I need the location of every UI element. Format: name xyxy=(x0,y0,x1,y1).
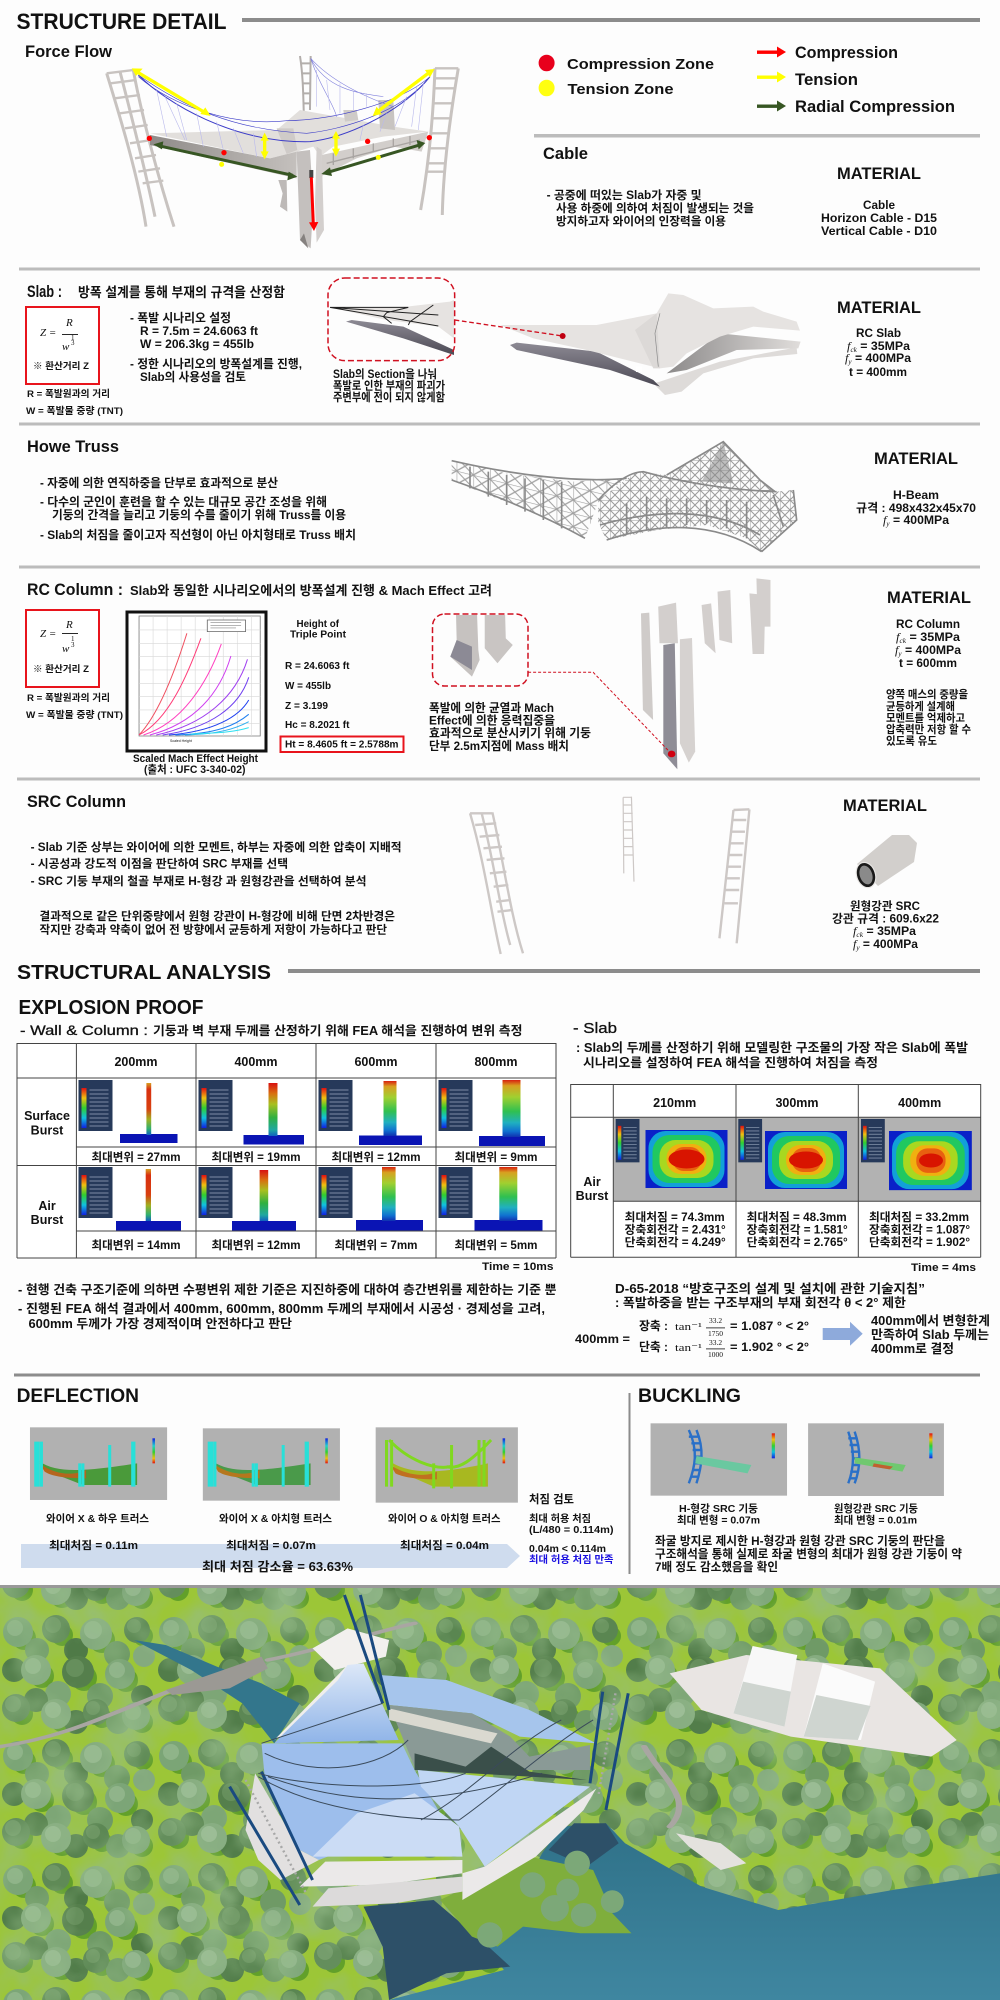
truss material: MATERIAL xyxy=(874,449,958,468)
slab material: RC Slab xyxy=(856,326,901,340)
src material: = 35MPa xyxy=(863,926,917,938)
panel: buckling xyxy=(638,1386,962,1574)
truss material: f xyxy=(883,513,888,527)
row labels xyxy=(24,1109,70,1227)
panel: rc column xyxy=(26,578,971,776)
row labels: Burst xyxy=(31,1213,64,1227)
formula box: 1 xyxy=(71,334,75,342)
time note: Time = 4ms xyxy=(911,1262,976,1274)
displacement values: 최대변위 = 12mm xyxy=(332,1150,420,1164)
slab analysis intro: 시나리오를 설정하여 FEA 해석을 진행하여 처짐을 측정 xyxy=(583,1055,878,1070)
wall and column intro xyxy=(20,1022,522,1038)
formula notes xyxy=(26,388,123,417)
chart caption xyxy=(133,753,258,776)
island xyxy=(440,1857,631,1947)
central piers xyxy=(278,147,324,248)
leader to mass point xyxy=(528,672,675,757)
buckling captions: 최대 변형 = 0.07m xyxy=(677,1514,760,1526)
title: structural analysis: STRUCTURAL ANALYSIS xyxy=(17,962,271,984)
deflection and rotation values: 장축회전각 = 2.431° xyxy=(625,1222,726,1236)
blast scenario text xyxy=(130,311,302,384)
chart caption: Scaled Mach Effect Height xyxy=(133,753,258,765)
cable material: Vertical Cable - D10 xyxy=(821,226,937,238)
src material xyxy=(832,796,939,952)
src text: 작지만 강축과 약축이 없어 전 방향에서 균등하게 저항이 가능하다고 판단 xyxy=(40,922,387,936)
blast scenario text: Slab의 사용성을 검토 xyxy=(140,370,246,384)
rotation check formula: 400mm = xyxy=(575,1332,630,1346)
formula box xyxy=(26,610,99,687)
rotation check formula: 단축 : xyxy=(639,1340,668,1354)
inset explanation: 단부 2.5m지점에 Mass 배치 xyxy=(429,739,569,753)
slab material: = 400MPa xyxy=(852,351,911,365)
deflection review: 최대 허용 처짐 xyxy=(529,1512,591,1525)
displacement values: 최대변위 = 12mm xyxy=(212,1238,300,1252)
rear roof wing xyxy=(379,1675,596,1743)
headers: 400mm xyxy=(898,1096,941,1110)
legend: force arrows: Compression xyxy=(795,43,898,62)
cable material: Cable xyxy=(863,200,895,212)
rc column material: ck xyxy=(899,637,907,645)
displacement values: 최대변위 = 7mm xyxy=(334,1238,418,1252)
formula box: Z = xyxy=(40,327,56,339)
slab material: y xyxy=(847,358,852,366)
rc column heading xyxy=(27,580,492,599)
truss material: H-Beam xyxy=(893,488,939,502)
left ladder column xyxy=(107,70,174,227)
deflection and rotation values: 단축회전각 = 1.902° xyxy=(869,1235,970,1249)
deflection values: 최대처짐 = 0.11m xyxy=(49,1538,138,1552)
legend: zones: Tension Zone xyxy=(568,81,674,98)
code reference xyxy=(615,1281,925,1310)
time note: Time = 10ms xyxy=(482,1261,554,1273)
rotation check formula: tan⁻¹ xyxy=(675,1342,702,1354)
deflection review: 최대 허용 처짐 만족 xyxy=(529,1553,614,1566)
deflection and rotation values: 장축회전각 = 1.087° xyxy=(869,1222,970,1236)
river xyxy=(134,1640,300,1743)
rendering: aerial view of building in forest xyxy=(0,1585,1000,2000)
deflection review: (L/480 = 0.114m) xyxy=(529,1525,614,1536)
formula notes: W = 폭발물 중량 (TNT) xyxy=(26,405,123,417)
formula box xyxy=(26,307,99,384)
buckling captions: 최대 변형 = 0.01m xyxy=(834,1514,917,1526)
text block: cable description: 방지하고자 와이어의 인장력을 이용 xyxy=(556,214,726,228)
panel: deflection xyxy=(17,1386,614,1574)
buckling captions: H-형강 SRC 기둥 xyxy=(679,1502,758,1515)
headers: 210mm xyxy=(653,1096,696,1110)
rc column note: 압축력만 저항 할 수 xyxy=(886,722,971,736)
heading: explosion proof: EXPLOSION PROOF xyxy=(18,997,204,1019)
connector to inset xyxy=(455,320,566,339)
src text: - SRC 기둥 부재의 철골 부재로 H-형강 과 원형강관을 선택하여 분석 xyxy=(31,874,367,888)
rc column material: RC Column xyxy=(896,617,960,631)
panel: buckling: BUCKLING xyxy=(638,1386,741,1407)
sails xyxy=(274,1663,399,1743)
clearing with white buildings xyxy=(313,1628,957,1757)
rc column material: = 35MPa xyxy=(906,630,960,644)
truss material: 규격 : 498x432x45x70 xyxy=(856,501,976,515)
truss model xyxy=(452,442,797,552)
src text: - Slab 기준 상부는 와이어에 의한 모멘트, 하부는 자중에 의한 압축이 지배적 xyxy=(31,840,402,854)
truss text: - 다수의 군인이 훈련을 할 수 있는 대규모 공간 조성을 위해 xyxy=(40,494,327,509)
yellow tension arrows xyxy=(132,68,435,159)
truss text: - Slab의 처짐을 줄이고자 직선형이 아닌 아치형태로 Truss 배치 xyxy=(40,527,356,542)
chart: scaled mach effect height xyxy=(127,612,266,751)
formula box: 1 xyxy=(71,635,75,643)
inset caption xyxy=(333,367,445,404)
table: wall and column FEA xyxy=(17,1043,556,1258)
triple point calc: R = 24.6063 ft xyxy=(285,660,350,672)
arrow: to conclusion xyxy=(823,1322,863,1346)
displacement values: 최대변위 = 9mm xyxy=(454,1150,538,1164)
src text xyxy=(31,840,402,936)
displacement values: 최대변위 = 19mm xyxy=(212,1150,300,1164)
formula box: ※ 환산거리 Z xyxy=(33,360,90,371)
truss text xyxy=(40,475,356,542)
road and bridge xyxy=(0,1623,679,1827)
triple point calc: Height of xyxy=(296,618,339,630)
formula box: R xyxy=(65,317,73,329)
slab contour plots xyxy=(616,1119,972,1190)
slab conclusion: 400mm로 결정 xyxy=(871,1342,954,1356)
conclusions: wall and column: - 진행된 FEA 해석 결과에서 400mm, 600mm, 800mm 두께의 부재에서 시공성 · 경제성을 고려, xyxy=(18,1301,545,1316)
panel: cable xyxy=(543,144,938,238)
conclusions: wall and column: - 현행 건축 구조기준에 의하면 수평변위 제한 기준은 지진하중에 대하여 층간변위를 제한하는 기준 뿐 xyxy=(18,1282,556,1297)
back ladder column xyxy=(300,56,311,120)
deflection captions: 와이어 X & 하우 트러스 xyxy=(46,1512,149,1525)
headers: 300mm xyxy=(775,1096,819,1110)
displacement values: 최대변위 = 5mm xyxy=(454,1238,538,1252)
icon: steel pipe xyxy=(852,835,917,891)
triple point calc: Triple Point xyxy=(290,628,346,640)
legend: zones xyxy=(539,55,714,98)
deflection review: 0.04m < 0.114m xyxy=(529,1544,606,1555)
code reference: D-65-2018 “방호구조의 설계 및 설치에 관한 기술지침” xyxy=(615,1281,925,1296)
FEA result images xyxy=(78,1080,545,1230)
blast scenario text: - 폭발 시나리오 설정 xyxy=(130,311,231,325)
formula box: 3 xyxy=(71,641,75,649)
slab model xyxy=(500,293,801,395)
triple point calc: Hc = 8.2021 ft xyxy=(285,719,350,731)
rc column heading: RC Column : xyxy=(27,580,123,599)
wall and column intro: 기둥과 벽 부재 두께를 산정하기 위해 FEA 해석을 진행하여 변위 측정 xyxy=(153,1023,522,1038)
inset explanation: Effect에 의한 응력집중을 xyxy=(429,712,555,728)
panel: howe truss: Howe Truss xyxy=(27,437,119,456)
formula box: w xyxy=(62,643,70,655)
slab material: ck xyxy=(850,346,858,354)
src text: 결과적으로 같은 단위중량에서 원형 강관이 H-형강에 비해 단면 2차반경은 xyxy=(40,909,395,923)
slab analysis intro: - Slab xyxy=(573,1020,617,1037)
row label: Burst xyxy=(576,1189,609,1203)
rc column material: f xyxy=(896,630,901,644)
buckling model images xyxy=(651,1423,944,1496)
src material: 원형강관 SRC xyxy=(850,899,920,913)
arrow banner xyxy=(21,1544,520,1568)
src ladder columns xyxy=(470,797,749,954)
rotation check formula: 장축 : xyxy=(639,1319,668,1333)
roof slab diagram xyxy=(328,278,801,395)
conclusions: wall and column xyxy=(18,1282,556,1331)
chart: scaled mach effect height: Scaled Height xyxy=(170,739,192,743)
formula notes: R = 폭발원과의 거리 xyxy=(27,692,110,704)
masts and cables xyxy=(230,1595,628,1905)
rc column note: 균등하게 설계해 xyxy=(886,699,955,713)
formula box: R xyxy=(65,619,73,631)
deflection and rotation values: 장축회전각 = 1.581° xyxy=(747,1222,848,1236)
red compression arrow xyxy=(309,177,318,231)
code reference: : 폭발하중을 받는 구조부재의 부재 회전각 θ < 2° 제한 xyxy=(615,1295,907,1310)
buckling captions: 원형강관 SRC 기둥 xyxy=(834,1502,918,1515)
shoreline land by road xyxy=(676,1833,746,1870)
rc column material: = 400MPa xyxy=(902,643,961,657)
inset explanation xyxy=(429,700,591,753)
title: structure detail: STRUCTURE DETAIL xyxy=(16,9,226,34)
deflection captions: 와이어 O & 아치형 트러스 xyxy=(388,1512,501,1525)
cable material: MATERIAL xyxy=(837,164,921,183)
panel: deflection: DEFLECTION xyxy=(17,1386,139,1407)
src text: - 시공성과 강도적 이점을 판단하여 SRC 부재를 선택 xyxy=(31,856,288,870)
truss text: 기둥의 간격을 늘리고 기둥의 수를 줄이기 위해 Truss를 이용 xyxy=(52,507,346,522)
buckling captions xyxy=(677,1502,918,1526)
formula box: 3 xyxy=(71,339,75,347)
buckling conclusion xyxy=(655,1533,962,1574)
slab material: = 35MPa xyxy=(857,339,910,353)
slab material xyxy=(837,298,921,379)
deflection and rotation values: 최대처짐 = 33.2mm xyxy=(869,1210,969,1224)
rc column material: t = 600mm xyxy=(899,656,957,670)
legend: force arrows: Radial Compression xyxy=(795,97,955,116)
src material: f xyxy=(853,926,858,938)
rc column material xyxy=(887,588,971,670)
deck xyxy=(150,100,428,178)
row labels: Air xyxy=(38,1199,56,1213)
buckling conclusion: 구조해석을 통해 실제로 좌굴 변형의 최대가 원형 강관 기둥이 약 xyxy=(655,1546,962,1561)
force flow bridge diagram xyxy=(107,56,458,248)
truss material xyxy=(856,449,976,528)
blast scenario text: - 정한 시나리오의 방폭설계를 진행, xyxy=(130,356,302,371)
rotation check formula: = 1.902 ° < 2° xyxy=(730,1340,809,1354)
triple point calc xyxy=(280,618,404,752)
right ladder column xyxy=(421,68,458,215)
text block: cable description xyxy=(547,188,754,228)
rc column note: 있도록 유도 xyxy=(886,734,937,748)
column headers: 200mm xyxy=(114,1055,158,1069)
row label xyxy=(576,1175,609,1203)
displacement values: 최대변위 = 27mm xyxy=(92,1150,180,1164)
heading: force flow: Force Flow xyxy=(25,42,113,61)
rotation check formula: tan⁻¹ xyxy=(675,1321,702,1333)
column headers: 400mm xyxy=(234,1055,278,1069)
inset explanation: 효과적으로 분산시키기 위해 기둥 xyxy=(429,725,591,740)
truss material: = 400MPa xyxy=(890,513,949,527)
triple point calc: W = 455lb xyxy=(285,680,331,692)
deflection review xyxy=(529,1493,614,1566)
formula box: w xyxy=(62,341,70,353)
chart caption: (출처 : UFC 3-340-02) xyxy=(144,763,246,776)
blast scenario text: W = 206.3kg = 455lb xyxy=(140,337,254,351)
blast scenario text: R = 7.5m = 24.6063 ft xyxy=(140,324,258,338)
legend: force arrows xyxy=(757,43,955,116)
column headers xyxy=(114,1055,518,1069)
slab heading: 방폭 설계를 통해 부재의 규격을 산정함 xyxy=(78,285,286,300)
deflection and rotation values: 최대처짐 = 48.3mm xyxy=(747,1210,847,1224)
triple point calc: Ht = 8.4605 ft = 2.5788m xyxy=(285,738,398,750)
text block: cable description: 사용 하중에 의하여 처짐이 발생되는 것을 xyxy=(556,201,754,215)
rc column note: 양쪽 매스의 중량을 xyxy=(886,687,968,701)
deflection and rotation values: 단축회전각 = 2.765° xyxy=(747,1235,848,1249)
panel: slab xyxy=(26,278,921,417)
rotation check formula: 1750 xyxy=(708,1329,723,1338)
rc column heading: Slab와 동일한 시나리오에서의 방폭설계 진행 & Mach Effect 고려 xyxy=(130,583,492,598)
deflection and rotation values xyxy=(625,1210,970,1249)
formula box: ※ 환산거리 Z xyxy=(33,663,90,674)
slab conclusion: 만족하여 Slab 두께는 xyxy=(871,1328,989,1342)
deflection and rotation values: 최대처짐 = 74.3mm xyxy=(625,1210,725,1224)
rc column material: f xyxy=(895,643,900,657)
rc column note xyxy=(886,687,971,748)
building shadow on water xyxy=(364,1900,510,2000)
text block: cable description: - 공중에 떠있는 Slab가 자중 및 xyxy=(547,188,702,202)
lake xyxy=(389,1823,1000,2000)
slab analysis intro xyxy=(573,1020,969,1070)
conclusions: wall and column: 600mm 두께가 가장 경제적이며 안전하다고 판단 xyxy=(28,1316,293,1331)
row labels: Burst xyxy=(31,1124,64,1138)
inset caption: 폭발로 인한 부재의 파괴가 xyxy=(333,378,445,392)
rotation check formula xyxy=(575,1316,809,1359)
column inset xyxy=(432,614,528,686)
deflection captions: 와이어 X & 아치형 트러스 xyxy=(219,1512,332,1525)
legend: zones: Compression Zone xyxy=(567,56,714,73)
src material: = 400MPa xyxy=(860,939,919,951)
deflection values: 최대처짐 = 0.07m xyxy=(226,1538,316,1552)
cable material: Horizon Cable - D15 xyxy=(821,213,938,225)
src material: MATERIAL xyxy=(843,796,927,815)
row labels: Surface xyxy=(24,1109,70,1123)
inset explanation: 폭발에 의한 균열과 Mach xyxy=(429,700,554,715)
panel: howe truss xyxy=(27,437,976,552)
slab material: f xyxy=(845,351,850,365)
inset detail xyxy=(328,278,455,361)
cables xyxy=(138,58,430,157)
displacement values xyxy=(92,1150,538,1252)
rc column models xyxy=(641,578,770,769)
rotation check formula: 33.2 xyxy=(709,1316,722,1325)
slab analysis intro: : Slab의 두께를 산정하기 위해 모델링한 구조물의 가장 작은 Slab에 폭발 xyxy=(576,1040,969,1055)
rc column material: MATERIAL xyxy=(887,588,971,607)
deflection review: 처짐 검토 xyxy=(529,1493,574,1506)
cable material xyxy=(821,164,938,238)
inset caption: 주변부에 전이 되지 않게함 xyxy=(333,390,445,404)
displacement values: 최대변위 = 14mm xyxy=(92,1238,180,1252)
triple point calc: Z = 3.199 xyxy=(285,700,328,712)
formula notes: W = 폭발물 중량 (TNT) xyxy=(26,709,123,721)
slab material: f xyxy=(847,339,852,353)
formula notes xyxy=(26,692,123,721)
src material: 강관 규격 : 609.6x22 xyxy=(832,912,939,926)
rc column note: 모멘트를 억제하고 xyxy=(886,710,965,724)
deflection and rotation values: 단축회전각 = 4.249° xyxy=(625,1235,726,1249)
legend: force arrows: Tension xyxy=(795,70,858,89)
deflection model images xyxy=(30,1427,518,1503)
truss text: - 자중에 의한 연직하중을 단부로 효과적으로 분산 xyxy=(40,475,278,490)
inset caption: Slab의 Section을 나눠 xyxy=(333,367,437,381)
panel: src column: SRC Column xyxy=(27,792,126,811)
green radial compression arrows xyxy=(153,140,425,180)
deflection values: 최대 처짐 감소율 = 63.63% xyxy=(202,1560,353,1574)
white slabs xyxy=(246,1773,319,1880)
deflection captions xyxy=(46,1512,501,1525)
wall and column intro: - Wall & Column : xyxy=(20,1022,148,1038)
formula box: Z = xyxy=(40,628,56,640)
headers xyxy=(653,1096,941,1110)
slab heading xyxy=(27,282,286,301)
src material: y xyxy=(855,944,861,952)
buckling conclusion: 좌굴 방지로 제시한 H-형강과 원형 강관 SRC 기둥의 판단을 xyxy=(655,1533,945,1548)
src material: ck xyxy=(856,931,864,939)
panel: cable: Cable xyxy=(543,144,588,163)
rotation check formula: = 1.087 ° < 2° xyxy=(730,1319,809,1333)
rc column material: y xyxy=(897,650,902,658)
slab conclusion: 400mm에서 변형한계 xyxy=(871,1313,990,1328)
rotation check formula: 33.2 xyxy=(709,1338,722,1347)
rotation check formula: 1000 xyxy=(708,1350,723,1359)
column headers: 600mm xyxy=(354,1055,398,1069)
row label: Air xyxy=(583,1175,601,1189)
table: slab FEA xyxy=(571,1084,981,1257)
buckling conclusion: 7배 정도 감소했음을 확인 xyxy=(655,1559,778,1574)
deflection values: 최대처짐 = 0.04m xyxy=(400,1538,489,1552)
src material: f xyxy=(853,939,858,951)
column headers: 800mm xyxy=(474,1055,518,1069)
slab conclusion xyxy=(871,1313,990,1356)
slab heading: Slab : xyxy=(27,282,62,301)
slab material: t = 400mm xyxy=(849,365,907,379)
slab material: MATERIAL xyxy=(837,298,921,317)
panel: src column xyxy=(27,792,939,954)
deflection values xyxy=(49,1538,489,1574)
formula notes: R = 폭발원과의 거리 xyxy=(27,388,110,400)
truss material: y xyxy=(885,520,890,528)
zone markers xyxy=(147,135,432,167)
